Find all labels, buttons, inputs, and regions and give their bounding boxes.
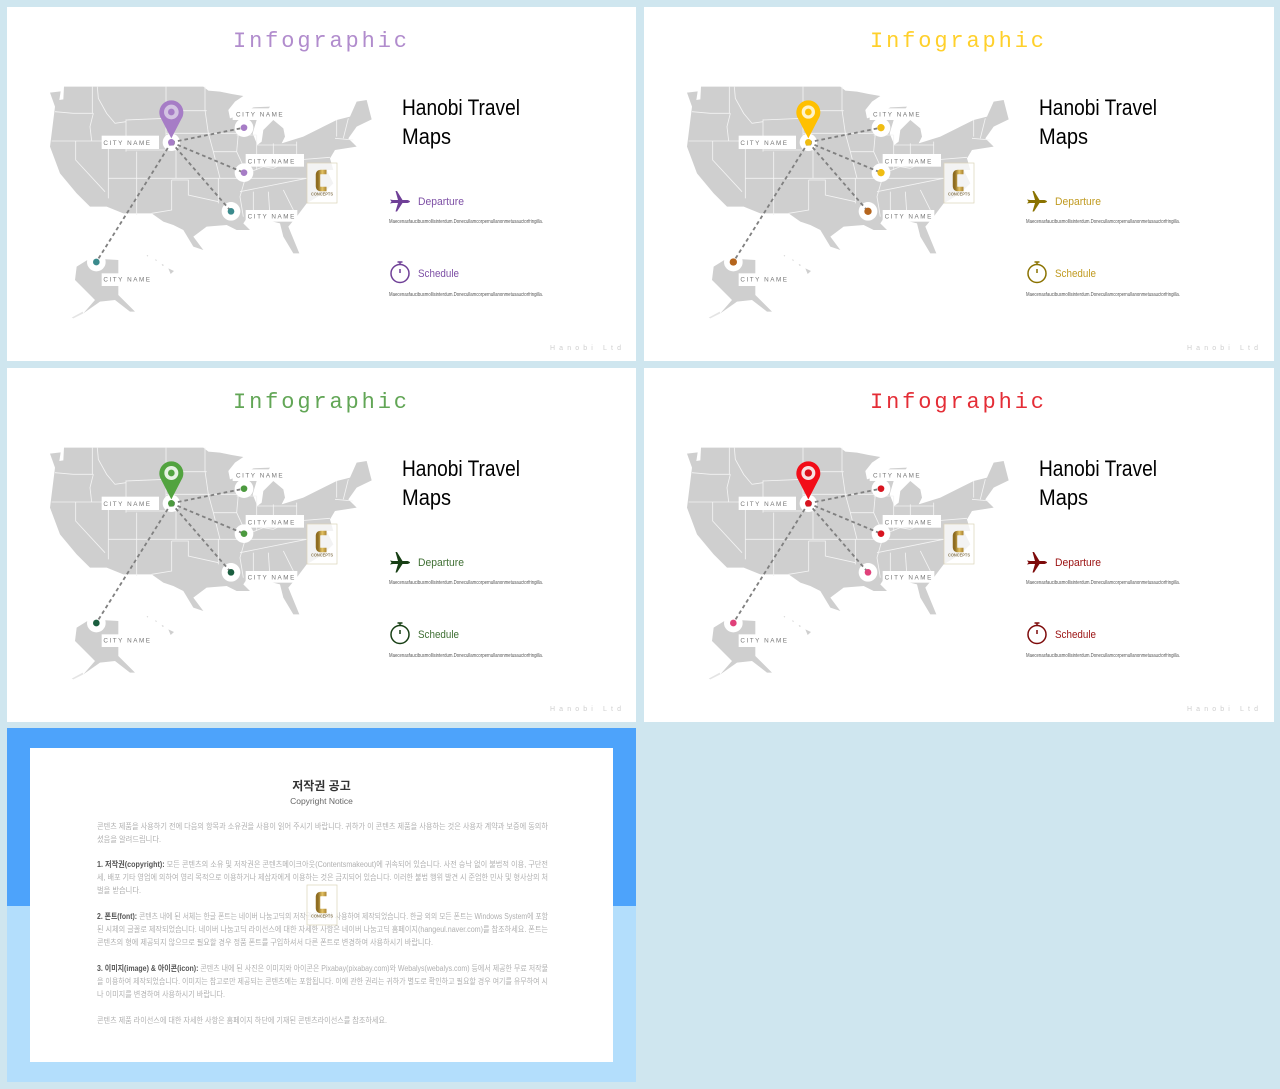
panel: red travel map slide: [644, 368, 1274, 722]
city labels: CITY NAME: [885, 213, 931, 220]
schedule label: Schedule: [1055, 629, 1096, 641]
notice body text: 콘텐츠의 형에 제공되지 않으므로 필요할 경우 정품 폰트를 구입하셔서 다른 폰트로 변경하여 사용하시기 바랍니다.: [97, 937, 433, 947]
map pin: [159, 461, 183, 499]
city labels: CITY NAME: [103, 277, 150, 284]
panel: yellow travel map slide: [644, 7, 1274, 361]
notice body text: 셨음을 알려드립니다.: [97, 834, 161, 844]
city labels: [739, 108, 941, 286]
departure text: Maecenasfaucibusmollisinterdum.Donecullamcorpernullanonmetusauctorfringilla.: [389, 219, 543, 225]
city labels: CITY NAME: [248, 574, 294, 581]
city labels: CITY NAME: [103, 501, 150, 508]
heading: Hanobi Travel: [402, 456, 520, 481]
departure label: Departure: [418, 196, 464, 208]
city labels: [102, 108, 304, 286]
notice body text: 콘텐츠 제품을 사용하기 전에 다음의 항목과 소유권을 사용이 읽어 주시기 바랍니다. 귀하가 이 콘텐츠 제품을 사용하는 것은 사용자 계약과 보증에 동의하: [97, 821, 549, 831]
notice body text: 된 시체의 글꼴로 제작되었습니다. 네이버 나눔고딕 라이선스에 대한 자세한 사항은 네이버 나눔고딕 홈페이지(hangeul.naver.com)를 참조하세요. 폰트는: [97, 924, 548, 934]
logo watermark: CONCEPTS: [948, 192, 970, 196]
map of the United States: [50, 87, 372, 318]
notice subheading: Copyright Notice: [290, 796, 353, 806]
logo watermark: [307, 885, 337, 925]
schedule label: Schedule: [418, 629, 459, 641]
departure text: Maecenasfaucibusmollisinterdum.Donecullamcorpernullanonmetusauctorfringilla.: [1026, 219, 1180, 225]
notice body text: 3. 이미지(image) & 아이콘(icon): 콘텐츠 내에 된 사진은 이미지와 아이콘은 Pixabay(pixabay.com)와 Webalys(webalys.com) 등에서 제공한 무료 저작물: [97, 963, 548, 973]
city markers and route lines: [87, 479, 253, 632]
map of the United States: [50, 448, 372, 679]
icon: stopwatch: [391, 623, 409, 644]
white notice card: [30, 748, 613, 1062]
schedule label: Schedule: [1055, 268, 1096, 280]
schedule label: Schedule: [418, 268, 459, 280]
icon: plane: [1027, 191, 1047, 212]
city labels: [102, 469, 304, 647]
notice body text: 콘텐츠 제품 라이선스에 대한 자세한 사항은 홈페이지 하단에 기재된 콘텐츠라이선스를 참조하세요.: [97, 1015, 387, 1025]
map of the United States: [687, 448, 1009, 679]
icon: plane: [390, 191, 410, 212]
schedule text: Maecenasfaucibusmollisinterdum.Donecullamcorpernullanonmetusauctorfringilla.: [389, 653, 543, 659]
icon: stopwatch: [1028, 262, 1046, 282]
heading: Hanobi Travel: [1039, 95, 1157, 120]
title: Infographic: [870, 390, 1044, 415]
city markers and route lines: [87, 118, 253, 271]
map pin: [796, 461, 820, 499]
departure label: Departure: [1055, 196, 1101, 208]
departure text: Maecenasfaucibusmollisinterdum.Donecullamcorpernullanonmetusauctorfringilla.: [389, 580, 543, 586]
icon: plane: [390, 552, 410, 572]
footer brand: Hanobi Ltd: [550, 706, 621, 713]
title: Infographic: [233, 29, 407, 54]
city labels: CITY NAME: [740, 501, 787, 508]
city labels: [739, 469, 941, 647]
city labels: CITY NAME: [103, 638, 150, 645]
city labels: CITY NAME: [248, 158, 294, 165]
notice body text: 을 이용하여 제작되었습니다. 이미지는 참고로만 제공되는 콘텐츠에는 포함됩니다. 이에 관한 권리는 귀하가 별도로 확인하고 필요할 경우 여기를 유무하여 시: [97, 976, 548, 986]
notice heading: 저작권 공고: [292, 778, 351, 793]
city labels: CITY NAME: [103, 140, 150, 147]
logo watermark: CONCEPTS: [311, 914, 333, 918]
icon: stopwatch: [1028, 623, 1046, 644]
city labels: CITY NAME: [740, 277, 787, 284]
logo watermark: [944, 163, 974, 203]
heading: Hanobi Travel: [402, 95, 520, 120]
logo watermark: CONCEPTS: [948, 552, 970, 558]
city labels: CITY NAME: [740, 140, 787, 147]
heading: Maps: [1039, 124, 1088, 149]
logo watermark: CONCEPTS: [311, 552, 333, 558]
departure text: Maecenasfaucibusmollisinterdum.Donecullamcorpernullanonmetusauctorfringilla.: [1026, 580, 1180, 586]
logo watermark: [307, 163, 337, 203]
departure label: Departure: [1055, 557, 1101, 569]
city labels: CITY NAME: [740, 638, 787, 645]
city labels: CITY NAME: [248, 213, 294, 220]
departure label: Departure: [418, 557, 464, 569]
city labels: CITY NAME: [885, 519, 931, 526]
notice body text: 나 이미지를 변경하여 사용하시기 바랍니다.: [97, 989, 225, 999]
schedule text: Maecenasfaucibusmollisinterdum.Donecullamcorpernullanonmetusauctorfringilla.: [1026, 292, 1180, 298]
city labels: CITY NAME: [236, 112, 283, 119]
heading: Maps: [402, 124, 451, 149]
city labels: CITY NAME: [873, 112, 920, 119]
title: Infographic: [233, 390, 407, 415]
footer brand: Hanobi Ltd: [1187, 345, 1258, 352]
city markers and route lines: [724, 479, 890, 632]
panel: green travel map slide: [7, 368, 636, 722]
logo watermark: [307, 524, 337, 564]
logo watermark: CONCEPTS: [311, 192, 333, 196]
city labels: CITY NAME: [885, 574, 931, 581]
heading: Hanobi Travel: [1039, 456, 1157, 481]
schedule text: Maecenasfaucibusmollisinterdum.Donecullamcorpernullanonmetusauctorfringilla.: [389, 292, 543, 298]
notice body text: 2. 폰트(font): 콘텐츠 내에 된 서체는 한글 폰트는 네이버 나눔고딕의 저작권을 따라 사용하여 제작되었습니다. 한글 외의 모든 폰트는 Windows System에 포함: [97, 911, 549, 921]
footer brand: Hanobi Ltd: [1187, 706, 1258, 713]
title: Infographic: [870, 29, 1044, 54]
city markers and route lines: [724, 118, 890, 271]
icon: stopwatch: [391, 262, 409, 282]
notice body text: 1. 저작권(copyright): 모든 콘텐츠의 소유 및 저작권은 콘텐츠메이크아웃(Contentsmakeout)에 귀속되어 있습니다. 사전 승낙 없이 불법적 이용, 구단전: [97, 859, 548, 869]
map pin: [159, 100, 183, 138]
footer brand: Hanobi Ltd: [550, 345, 621, 352]
city labels: CITY NAME: [873, 473, 920, 480]
heading: Maps: [1039, 485, 1088, 510]
logo watermark: [944, 524, 974, 564]
map of the United States: [687, 87, 1009, 318]
map pin: [796, 100, 820, 138]
schedule text: Maecenasfaucibusmollisinterdum.Donecullamcorpernullanonmetusauctorfringilla.: [1026, 653, 1180, 659]
panel: copyright notice: [7, 728, 636, 1082]
notice body text: [97, 821, 549, 1025]
icon: plane: [1027, 552, 1047, 572]
notice body text: 세, 배포 기타 영업에 의하여 영리 목적으로 이용하거나 제삼자에게 이용하는 것은 금지되어 있습니다. 이러한 불법 행위 발견 시 준엄한 민사 및 형사상의 처: [97, 872, 548, 882]
city labels: CITY NAME: [236, 473, 283, 480]
city labels: CITY NAME: [885, 158, 931, 165]
notice body text: 벌을 받습니다.: [97, 885, 141, 895]
city labels: CITY NAME: [248, 519, 294, 526]
panel: purple travel map slide: [7, 7, 636, 361]
heading: Maps: [402, 485, 451, 510]
